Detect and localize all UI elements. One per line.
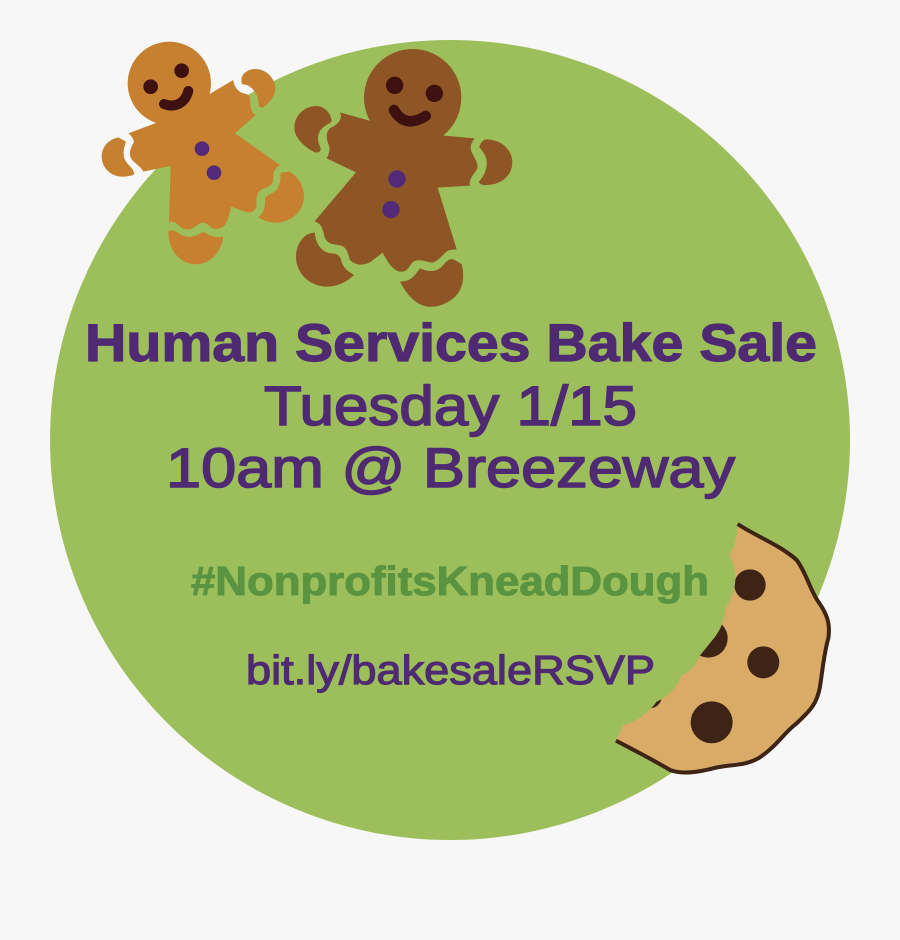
light gingerbread body [102,42,304,264]
icon: light gingerbread figure [102,42,304,264]
cookie dough [616,524,829,773]
light gingerbread buttons [195,141,221,180]
time and place line: 10am @ Breezeway [166,436,735,499]
green circle panel [50,40,850,840]
title: Human Services Bake Sale [85,314,817,373]
dark gingerbread buttons [382,170,406,218]
infographic canvas [50,40,850,840]
dark gingerbread face [386,77,443,121]
light gingerbread face [143,63,189,106]
icon: bitten cookie [616,524,829,773]
cookie outline [616,524,829,773]
icon: dark gingerbread figure [294,49,512,307]
dark gingerbread body [294,49,512,307]
hashtag: #NonprofitsKneadDough [191,558,709,604]
chocolate chips [638,569,779,743]
date line: Tuesday 1/15 [264,374,637,437]
RSVP link: bit.ly/bakesaleRSVP [246,647,655,693]
